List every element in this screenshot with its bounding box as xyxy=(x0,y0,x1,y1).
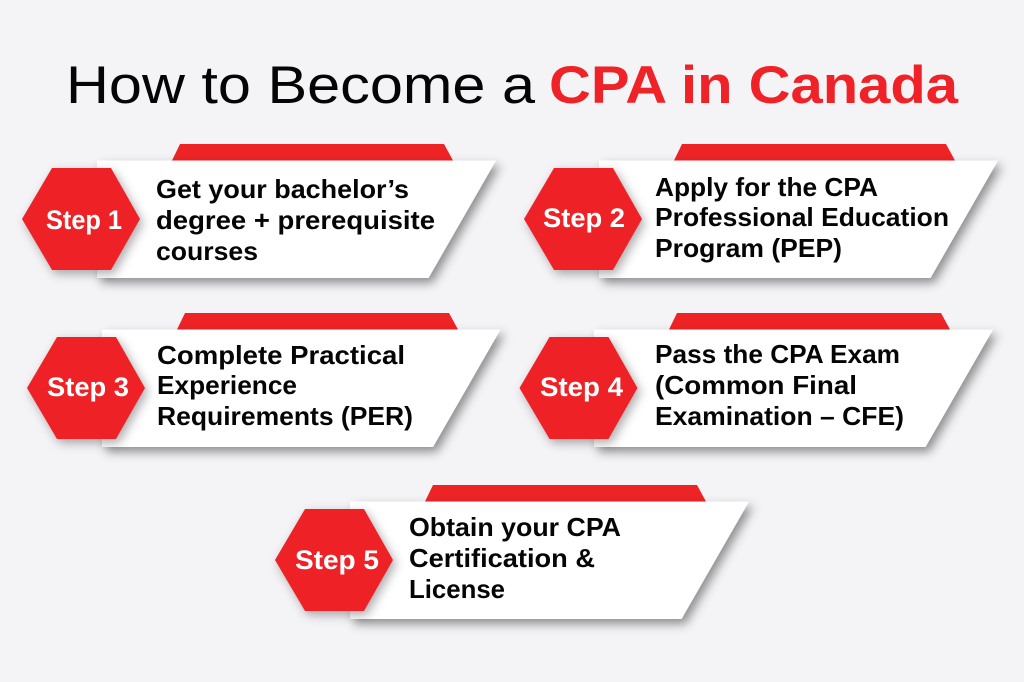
panel: step 1: Get your bachelor’s xyxy=(156,174,409,204)
panel: step 1 xyxy=(22,144,496,278)
panel: step 2: Professional Education xyxy=(655,202,949,232)
panel: step 4: (Common Final xyxy=(655,370,857,400)
panel: step 3: Requirements (PER) xyxy=(157,401,413,431)
panel: step 4 xyxy=(520,313,993,447)
panel: step 2 xyxy=(524,144,998,278)
panel: step 2: Program (PEP) xyxy=(655,233,842,263)
panel: step 3 xyxy=(27,313,500,447)
title xyxy=(66,56,959,115)
panel: step 1: courses xyxy=(156,236,258,266)
panel: step 5 xyxy=(275,485,749,619)
panel: step 4: Examination – CFE) xyxy=(655,401,904,431)
panel: step 1: Step 1 xyxy=(46,205,122,235)
panel: step 5: License xyxy=(409,574,505,604)
panel: step 5: Step 5 xyxy=(295,545,379,575)
panel: step 4: Step 4 xyxy=(540,372,623,402)
panel: step 3: Step 3 xyxy=(47,372,129,402)
title: How to Become a xyxy=(66,56,536,115)
panel: step 2: Step 2 xyxy=(543,203,625,233)
panel: step 4: Pass the CPA Exam xyxy=(655,339,900,369)
panel: step 3: Experience xyxy=(157,370,297,400)
panel: step 2: Apply for the CPA xyxy=(655,172,878,202)
panel: step 5: Obtain your CPA xyxy=(409,512,621,542)
panel: step 5: Certification & xyxy=(409,543,595,573)
panel: step 3: Complete Practical xyxy=(157,340,405,370)
title: CPA in Canada xyxy=(549,56,959,115)
panel: step 1: degree + prerequisite xyxy=(156,205,435,235)
